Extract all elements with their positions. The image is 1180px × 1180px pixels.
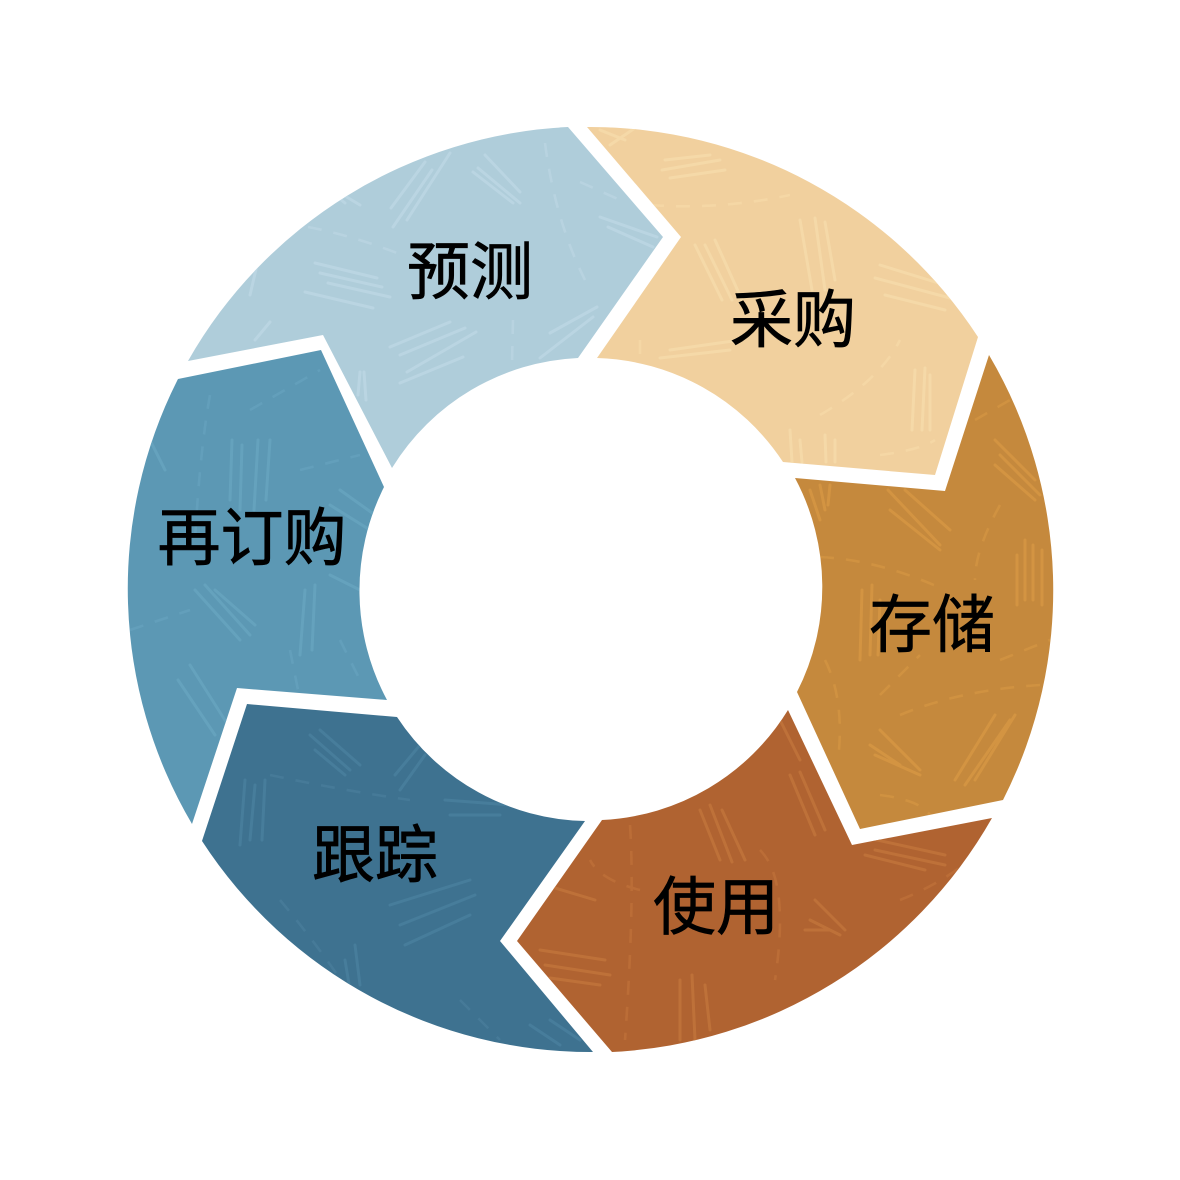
label: purchasing: 采购 (730, 286, 856, 356)
segment: purchasing (587, 127, 978, 475)
label: use: 使用 (653, 873, 779, 943)
segment: forecast (188, 127, 663, 468)
label: tracking: 跟踪 (312, 821, 438, 891)
segment: tracking (202, 704, 593, 1052)
segment: reorder (128, 350, 387, 824)
cycle diagram (128, 127, 1054, 1052)
segment: use (517, 710, 992, 1052)
label: storage: 存储 (869, 591, 995, 661)
label: reorder: 再订购 (158, 504, 346, 574)
label: forecast: 预测 (407, 238, 533, 308)
segment: storage (795, 355, 1053, 829)
